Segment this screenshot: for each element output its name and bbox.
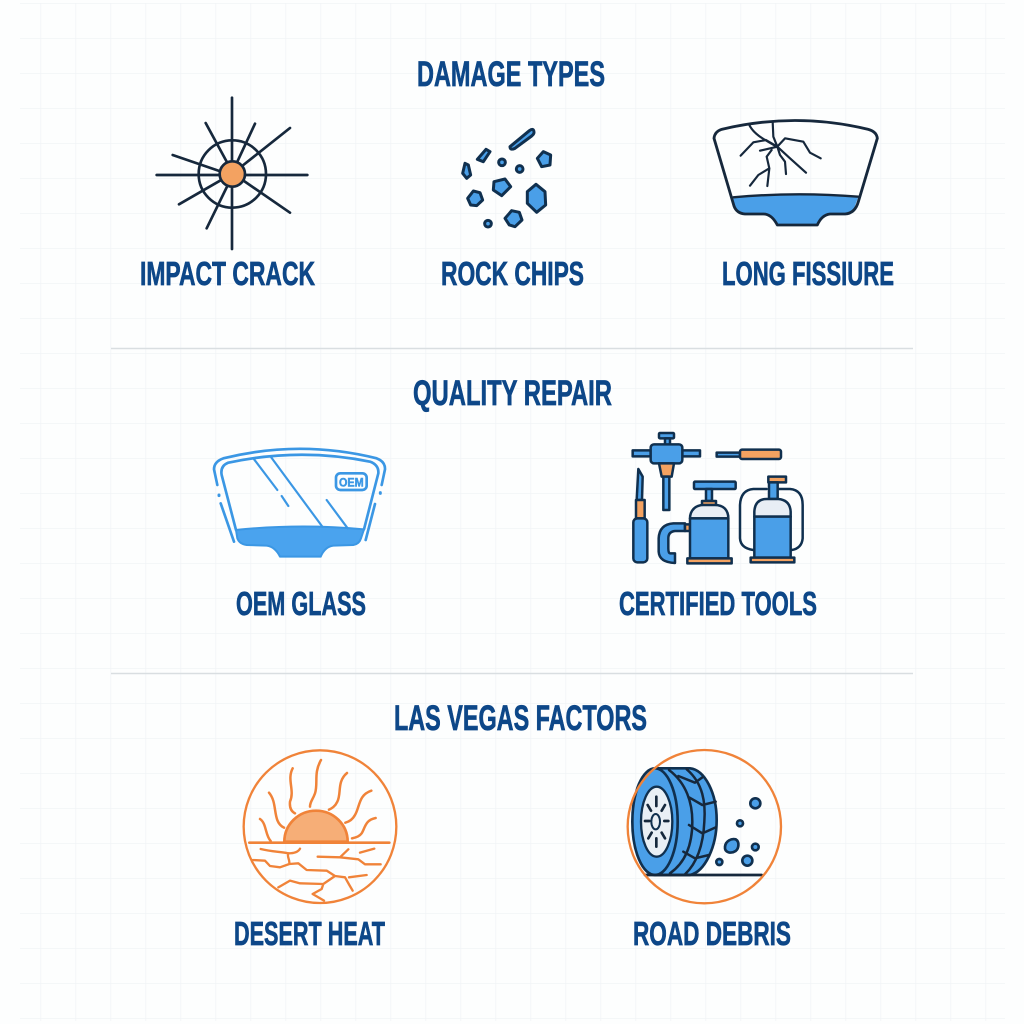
label: oem glass: OEM GLASS bbox=[236, 585, 366, 622]
icon: rock chips bbox=[463, 129, 551, 227]
icon: certified tools bbox=[633, 433, 803, 563]
label: long fissiure: LONG FISSIURE bbox=[722, 255, 894, 292]
label: rock chips: ROCK CHIPS bbox=[441, 255, 584, 292]
icon: OEM windshield bbox=[214, 449, 385, 557]
heading: quality repair: QUALITY REPAIR bbox=[413, 374, 612, 413]
label: road debris: ROAD DEBRIS bbox=[633, 915, 791, 952]
heading: damage types: DAMAGE TYPES bbox=[417, 55, 605, 94]
icon: impact crack bbox=[157, 98, 307, 249]
label: impact crack: IMPACT CRACK bbox=[140, 255, 315, 292]
icon: desert heat bbox=[244, 750, 396, 903]
heading: las vegas factors: LAS VEGAS FACTORS bbox=[394, 699, 647, 738]
icon: cracked windshield bbox=[714, 120, 877, 225]
icon: road debris bbox=[628, 750, 781, 903]
label: certified tools: CERTIFIED TOOLS bbox=[619, 585, 817, 622]
label: desert heat: DESERT HEAT bbox=[234, 915, 385, 952]
icon: OEM windshield: OEM bbox=[339, 476, 364, 490]
